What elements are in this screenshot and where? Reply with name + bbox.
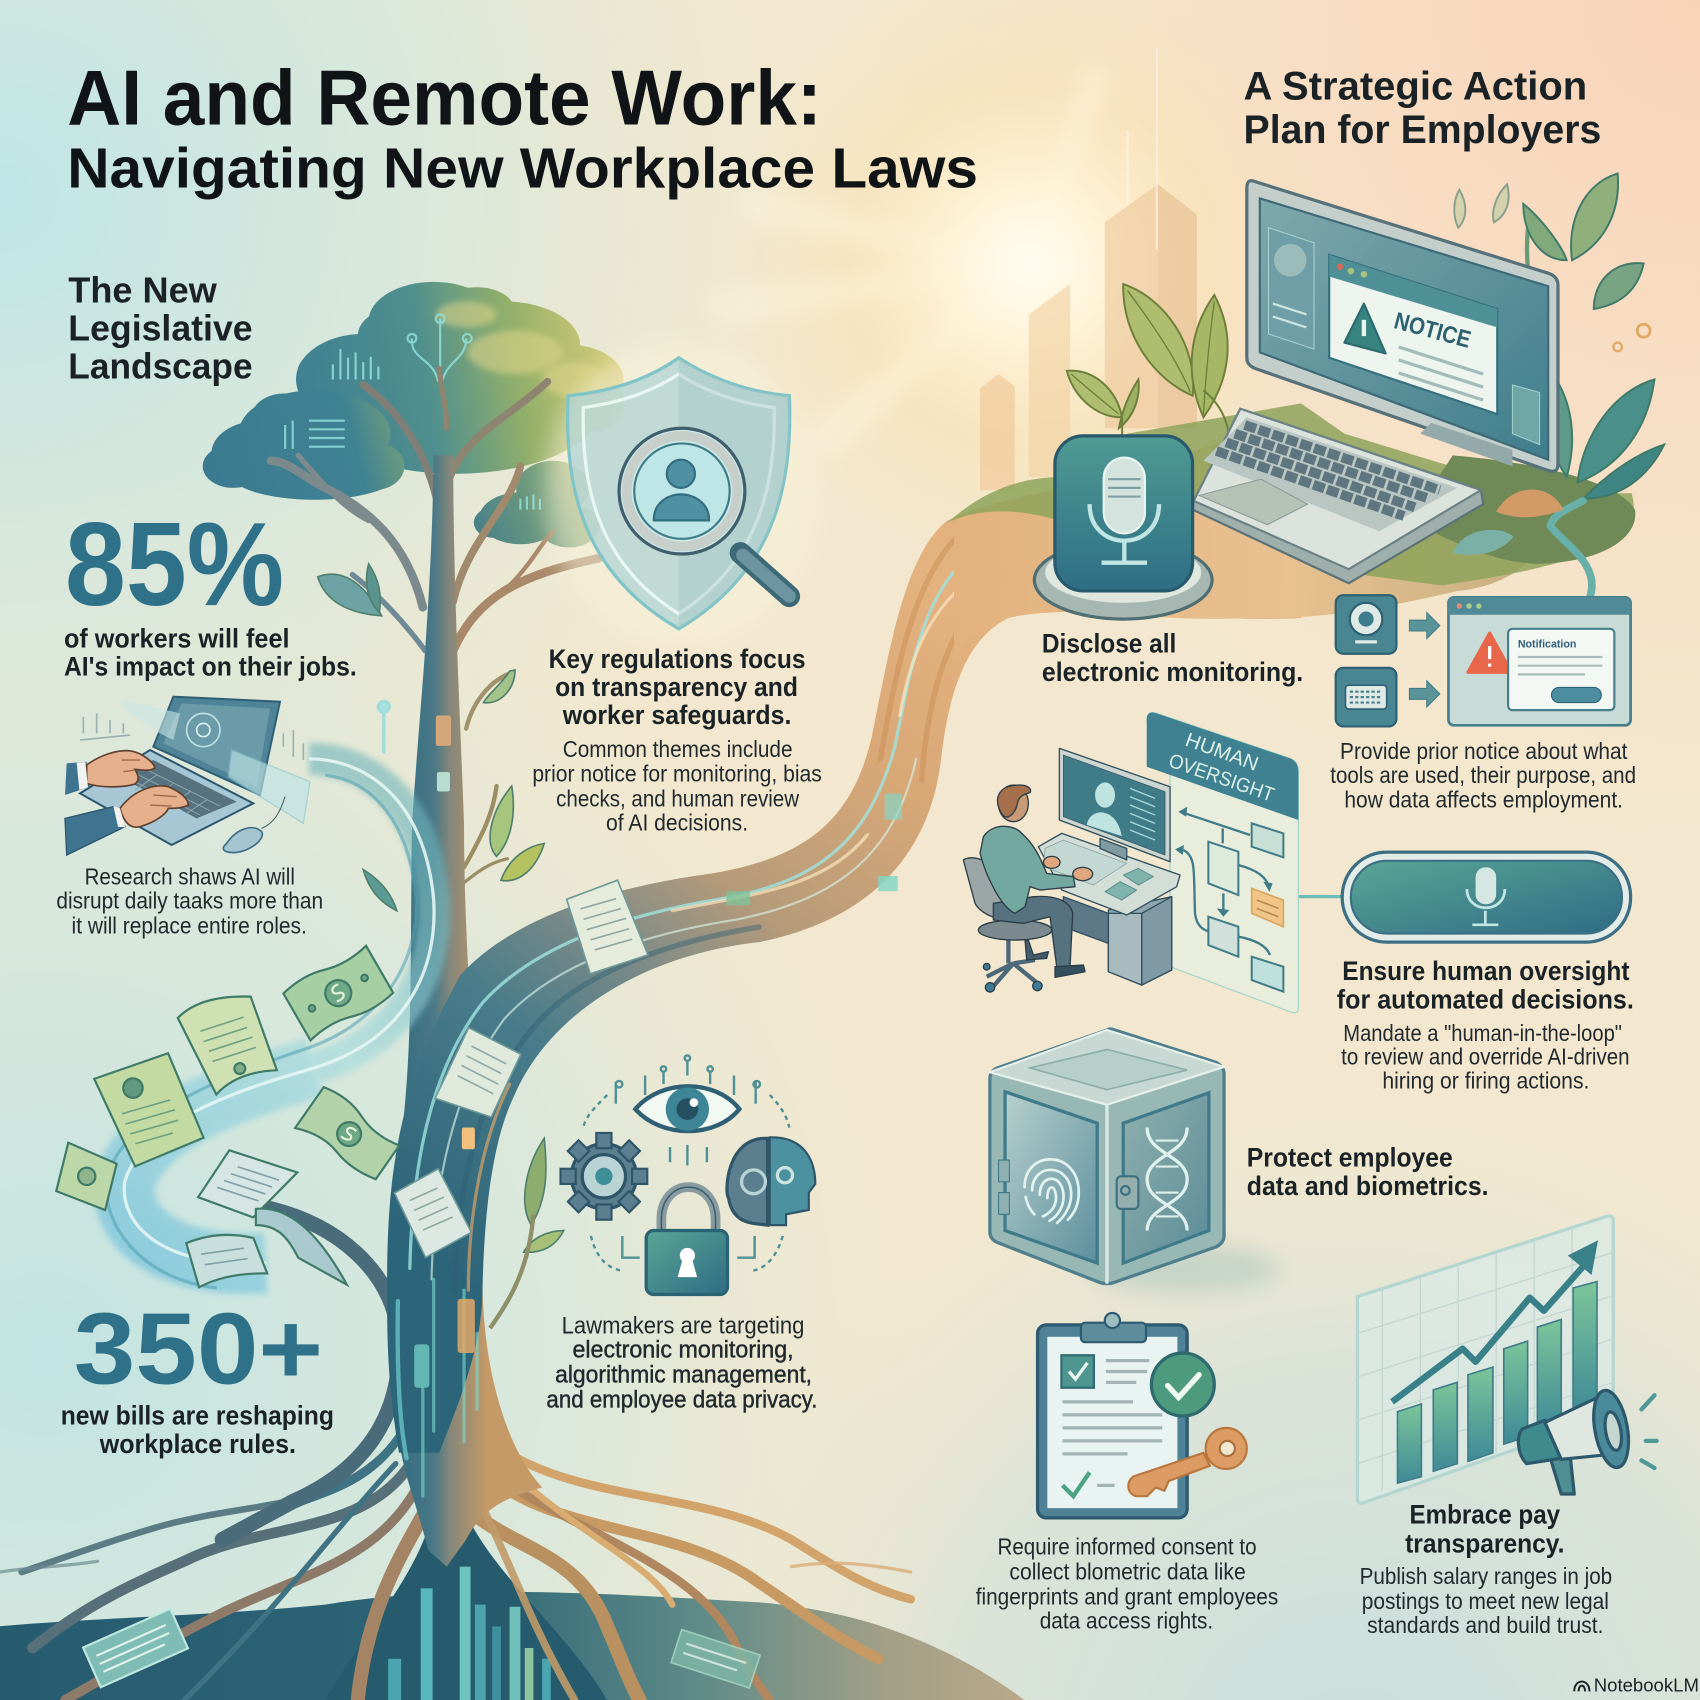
magnifier handle bbox=[740, 553, 789, 596]
oversight microphone pill bbox=[1342, 852, 1631, 942]
notification window bbox=[1448, 597, 1631, 725]
fingerprint bbox=[1025, 1159, 1079, 1223]
text: pay transparency: standards and build trust. bbox=[1367, 1612, 1604, 1638]
text: prior notice: Provide prior notice about what bbox=[1340, 738, 1628, 764]
action plan island with plants bbox=[948, 284, 1635, 661]
text: informed consent: Require informed consent to bbox=[997, 1534, 1257, 1560]
tree canopy bbox=[203, 282, 624, 1328]
desk monitor bbox=[1059, 748, 1170, 862]
bill left large bbox=[93, 1050, 206, 1171]
webcam tile bbox=[1336, 595, 1396, 654]
eye icon bbox=[635, 1086, 739, 1131]
stat: 85%: 85% bbox=[65, 498, 284, 631]
text: disclose monitoring bbox=[1042, 628, 1303, 687]
bill lower right bbox=[295, 1085, 403, 1183]
gear icon bbox=[561, 1133, 647, 1220]
circuit nodes bbox=[583, 1055, 789, 1271]
biometric data safe bbox=[990, 1029, 1279, 1292]
seated person and chair bbox=[963, 785, 1093, 992]
small circuit paper in the soil left bbox=[83, 1609, 188, 1687]
stat: 350+: 350+ bbox=[74, 1293, 323, 1405]
stat: 350+: new bills are reshaping bbox=[61, 1400, 334, 1431]
text: lawmakers: electronic monitoring, bbox=[572, 1336, 794, 1363]
text: lawmakers bbox=[546, 1313, 817, 1413]
data stream from trunk to action plan bbox=[387, 486, 1301, 1496]
small pin icon beside trunk bbox=[378, 701, 389, 754]
swirl of bills from laptop bbox=[106, 759, 434, 1288]
check badge bbox=[1151, 1353, 1214, 1416]
connector from island to notice window bbox=[1550, 501, 1592, 598]
pay transparency rising chart bbox=[1357, 1216, 1657, 1503]
text: lawmakers: algorithmic management, bbox=[555, 1361, 812, 1388]
text: key regulations: Common themes include bbox=[563, 736, 793, 762]
floating money bills bbox=[55, 943, 403, 1288]
stat: 85% bbox=[64, 498, 357, 681]
text: key regulations: prior notice for monitoring, bias bbox=[532, 761, 822, 787]
text: key regulations bbox=[532, 643, 822, 835]
text: protect data: data and biometrics. bbox=[1247, 1170, 1489, 1201]
text: protect data bbox=[1247, 1142, 1489, 1201]
stat: 85%: of workers will feel bbox=[64, 622, 289, 653]
text: key regulations: Key regulations focus bbox=[549, 643, 806, 674]
title: AI and Remote Work: bbox=[67, 54, 822, 142]
text: human oversight: Mandate a "human-in-the-loop" bbox=[1343, 1020, 1622, 1046]
stat: 350+ bbox=[61, 1293, 334, 1459]
text: human oversight: Ensure human oversight bbox=[1342, 955, 1630, 986]
text: informed consent: collect blometric data like bbox=[1009, 1559, 1246, 1585]
text: informed consent bbox=[976, 1534, 1278, 1633]
stream data chips bbox=[414, 591, 987, 1388]
text: pay transparency: Publish salary ranges in job bbox=[1360, 1563, 1612, 1589]
oversight flow panel bbox=[1147, 713, 1298, 1013]
title bbox=[67, 54, 978, 200]
text: key regulations: of AI decisions. bbox=[606, 809, 748, 835]
contract paper lower bbox=[186, 1229, 268, 1288]
text: key regulations: worker safeguards. bbox=[562, 699, 791, 730]
microphone tile on pedestal bbox=[1034, 436, 1212, 619]
text: human oversight: to review and override AI-driven bbox=[1341, 1044, 1630, 1070]
text: pay transparency: transparency. bbox=[1405, 1528, 1564, 1559]
arrows to window bbox=[1409, 613, 1440, 707]
text: pay transparency: Embrace pay bbox=[1409, 1498, 1560, 1529]
text: informed consent: fingerprints and grant employees bbox=[976, 1584, 1278, 1610]
text: pay transparency: postings to meet new legal bbox=[1362, 1588, 1609, 1614]
heading: the new legislative landscape bbox=[68, 270, 253, 386]
text: lawmakers: and employee data privacy. bbox=[546, 1386, 817, 1413]
trend arrow bbox=[1392, 1240, 1598, 1402]
small circuit paper in the soil right bbox=[671, 1630, 760, 1688]
right plants bbox=[1454, 173, 1664, 499]
bars bbox=[1398, 1282, 1597, 1483]
monitoring, algorithm and privacy icons bbox=[561, 1055, 815, 1295]
notice window bbox=[1329, 255, 1497, 414]
laptop on island bbox=[1193, 409, 1483, 583]
text: lawmakers: Lawmakers are targeting bbox=[562, 1313, 804, 1340]
stat: 85%: AI's impact on their jobs. bbox=[64, 650, 357, 681]
text: human oversight: for automated decisions. bbox=[1337, 983, 1634, 1014]
keyboard tile bbox=[1336, 668, 1396, 726]
title: Navigating New Workplace Laws bbox=[67, 137, 978, 200]
connector to oversight pill bbox=[1299, 895, 1342, 898]
text: key regulations: on transparency and bbox=[555, 671, 798, 702]
NotebookLM brand mark: NotebookLM bbox=[1594, 1674, 1699, 1695]
text: disclose monitoring: Disclose all bbox=[1042, 628, 1176, 659]
left laptop with hands illustration bbox=[65, 697, 310, 855]
ground and roots bbox=[0, 1420, 1025, 1700]
text: research note: it will replace entire roles. bbox=[72, 912, 307, 938]
key bbox=[1128, 1428, 1247, 1496]
left secondary dark branch bbox=[222, 1209, 399, 1540]
text: protect data: Protect employee bbox=[1247, 1142, 1453, 1173]
heading: strategic action plan bbox=[1244, 65, 1601, 152]
notification window: Notification bbox=[1518, 638, 1576, 650]
text: research note: Research shaws AI will bbox=[85, 864, 295, 890]
desktop monitor with notice bbox=[1247, 181, 1558, 471]
branches bbox=[271, 369, 598, 884]
digital glyphs in canopy bbox=[285, 314, 540, 510]
human oversight desk scene bbox=[963, 713, 1298, 1013]
heading: strategic action plan: A Strategic Action bbox=[1244, 65, 1587, 109]
contract paper bbox=[197, 1146, 297, 1226]
desk bbox=[1038, 833, 1180, 985]
heading: the new legislative landscape: Legislative bbox=[68, 308, 253, 348]
DNA helix bbox=[1147, 1128, 1187, 1231]
tree trunk bbox=[388, 455, 542, 1567]
oversight flow panel: OVERSIGHT bbox=[1166, 750, 1277, 807]
text: pay transparency bbox=[1360, 1498, 1612, 1638]
consent clipboard with key bbox=[1038, 1313, 1247, 1518]
notice window: NOTICE bbox=[1391, 308, 1474, 354]
oversight flow panel: HUMAN bbox=[1182, 729, 1261, 776]
padlock icon bbox=[646, 1187, 727, 1295]
data bars in the soil bbox=[388, 1567, 551, 1700]
text: key regulations: checks, and human review bbox=[556, 786, 800, 812]
heading: the new legislative landscape: Landscape bbox=[68, 346, 253, 386]
stones on island bbox=[1453, 490, 1563, 555]
heading: the new legislative landscape: The New bbox=[68, 270, 217, 310]
text: human oversight: hiring or firing actions. bbox=[1382, 1068, 1589, 1094]
text: human oversight bbox=[1337, 955, 1634, 1094]
megaphone bbox=[1518, 1388, 1634, 1494]
text: research note bbox=[56, 864, 323, 938]
papers on the stream bbox=[393, 878, 649, 1258]
text: prior notice: how data affects employment. bbox=[1344, 787, 1623, 813]
bill top right bbox=[282, 943, 395, 1043]
leaves bbox=[318, 564, 564, 1252]
shield with magnifier bbox=[545, 342, 816, 645]
heading: strategic action plan: Plan for Employers bbox=[1244, 108, 1601, 152]
bill top middle bbox=[176, 987, 278, 1098]
text: disclose monitoring: electronic monitoring. bbox=[1042, 656, 1303, 687]
text: prior notice: tools are used, their purpose, and bbox=[1330, 762, 1636, 788]
brain and head icon bbox=[727, 1137, 815, 1225]
stat: 350+: workplace rules. bbox=[99, 1428, 296, 1459]
text: informed consent: data access rights. bbox=[1040, 1607, 1213, 1633]
text: research note: disrupt daily taaks more than bbox=[56, 888, 323, 914]
text: prior notice bbox=[1330, 738, 1636, 813]
sunlit city buildings bbox=[980, 49, 1197, 490]
bill far left bbox=[55, 1143, 119, 1210]
